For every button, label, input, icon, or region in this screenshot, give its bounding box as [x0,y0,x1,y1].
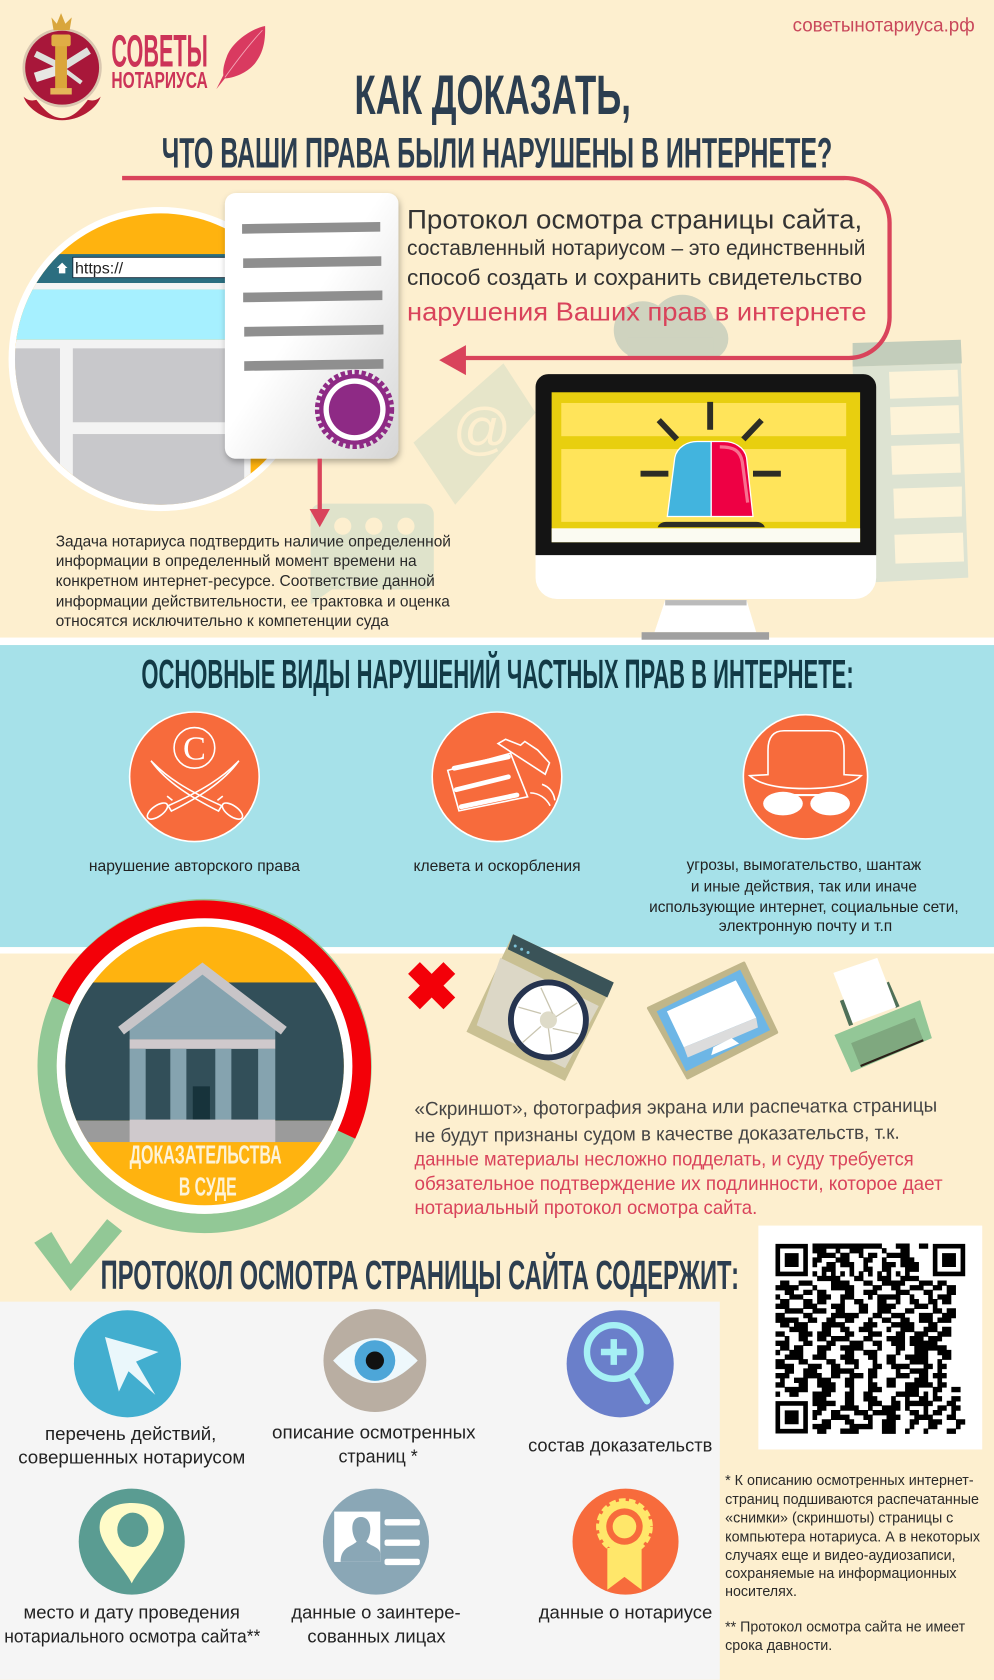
icon: notary badge [22,13,102,120]
text block: notary task: Задача нотариуса подтвердить наличие определенной [56,534,451,551]
text block: footnotes: носителях. [725,1584,797,1600]
label: place and date [4,1603,260,1646]
label: interested persons: сованных лицах [307,1626,446,1646]
arrow: red frame line [122,178,890,375]
illustration: notarized document [225,193,398,459]
background icon: table [853,340,968,583]
icon: check mark [34,1219,122,1291]
text block: protocol statement [407,204,867,327]
logo [22,13,265,120]
label: place and date: место и дату проведения [24,1603,240,1623]
icon: trash can [432,712,562,842]
panel: protocol contents [0,1302,720,1680]
site url: советынотариуса.рф [793,15,975,36]
text block: footnotes: * К описанию осмотренных интернет- [725,1473,974,1489]
icon: copyright swords [130,712,259,842]
text block: footnotes: «снимки» (скриншоты) страницы с [725,1510,953,1526]
label: threats: использующие интернет, социальные сети, [649,898,959,916]
illustration: browser circle [8,207,276,512]
label: interested persons: данные о заинтере- [291,1603,461,1623]
illustration: browser circle: https:// [75,259,124,277]
text block: footnotes: срока давности. [725,1638,832,1654]
label: list of actions [18,1424,245,1467]
label: interested persons [291,1603,461,1646]
label: description of pages [272,1423,476,1466]
label: list of actions: совершенных нотариусом [18,1447,245,1467]
text block: footnotes: компьютера нотариуса. А в некоторых [725,1530,981,1546]
label: threats: и иные действия, так или иначе [691,877,917,895]
text block: screenshots not accepted: обязательное подтверждение их подлинности, которое дает [415,1174,943,1195]
label: threats: угрозы, вымогательство, шантаж [687,856,921,874]
text block: protocol statement: нарушения Ваших прав в интернете [407,299,867,327]
text block: footnotes: сохраняемые на информационных [725,1566,957,1582]
icon: printer [833,958,932,1072]
icon: courthouse [121,969,284,1142]
label: notary data: данные о нотариусе [539,1603,712,1623]
qr code [758,1226,982,1449]
text block: notary task [56,534,451,630]
icon: siren [641,402,781,527]
text block: notary task: конкретном интернет-ресурсе. Соответствие данной [56,573,435,590]
text block: screenshots not accepted: «Скриншот», фотография экрана или распечатка страницы [414,1096,937,1120]
icon: tablet monitor [649,963,777,1078]
logo text [111,26,208,93]
text block: screenshots not accepted [414,1096,943,1219]
label: threats: электронную почту и т.п [719,917,892,935]
label: copyright: нарушение авторского права [89,857,300,875]
title [162,64,832,177]
text block: footnotes [725,1473,981,1654]
icon: feather [216,26,265,89]
arrow: down to task text [310,459,330,527]
background icon: envelope: @ [453,397,511,461]
illustration: court evidence circle [47,909,364,1223]
illustration: monitor with siren [536,374,876,640]
text block: footnotes: страниц подшиваются распечатанные [725,1492,979,1508]
logo text: НОТАРИУСА [111,67,208,93]
label: composition of evidence: состав доказательств [528,1436,712,1456]
logo: СОВЕТЫ [111,26,208,77]
text block: screenshots not accepted: не будут признаны судом в качестве доказательств, т.к. [414,1123,900,1147]
label: description of pages: страниц * [338,1446,418,1466]
icon: medal [573,1489,679,1595]
icon: hat and glasses [743,715,868,839]
text block: notary task: относятся исключительно к компетенции суда [56,613,389,630]
title: КАК ДОКАЗАТЬ, [355,64,631,126]
text block: screenshots not accepted: данные материалы несложно подделать, и суду требуется [415,1150,914,1171]
label: evidence in court: В СУДЕ [179,1174,237,1202]
icon: copyright swords: C [183,730,206,768]
text block: notary task: информации действительности, ее трактовка и оценка [56,593,450,610]
icon: person card [323,1489,429,1595]
text block: footnotes: случаях еще и видео-аудиозаписи, [725,1548,955,1564]
background icon: chat bubble [311,504,434,604]
text block: protocol statement: Протокол осмотра страницы сайта, [407,204,862,234]
icon: location pin [79,1489,185,1595]
label: place and date: нотариального осмотра сайта** [4,1626,260,1646]
background icon: envelope [413,363,536,505]
text block: notary task: информации в определенный момент времени на [56,553,417,570]
label: slander: клевета и оскорбления [413,857,581,875]
icon: red cross [408,962,455,1009]
panel: violation types [0,645,994,954]
label: list of actions: перечень действий, [45,1424,216,1444]
text block: screenshots not accepted: нотариальный протокол осмотра сайта. [415,1198,757,1219]
background icon: cloud [614,295,728,360]
label: threats [649,856,959,935]
icon: seal [318,373,391,446]
icon: magnifier [567,1310,674,1417]
text block: footnotes: ** Протокол осмотра сайта не имеет [725,1620,965,1636]
icon: cursor [74,1310,181,1417]
text block: protocol statement: способ создать и сохранить свидетельство [407,265,862,290]
label: evidence in court: ДОКАЗАТЕЛЬСТВА [130,1141,282,1169]
label: description of pages: описание осмотренных [272,1423,476,1443]
text block: protocol statement: составленный нотариусом – это единственный [407,237,865,260]
icon: eye [323,1309,426,1412]
label: evidence in court [130,1141,282,1202]
icon: screenshot camera window [466,934,614,1081]
